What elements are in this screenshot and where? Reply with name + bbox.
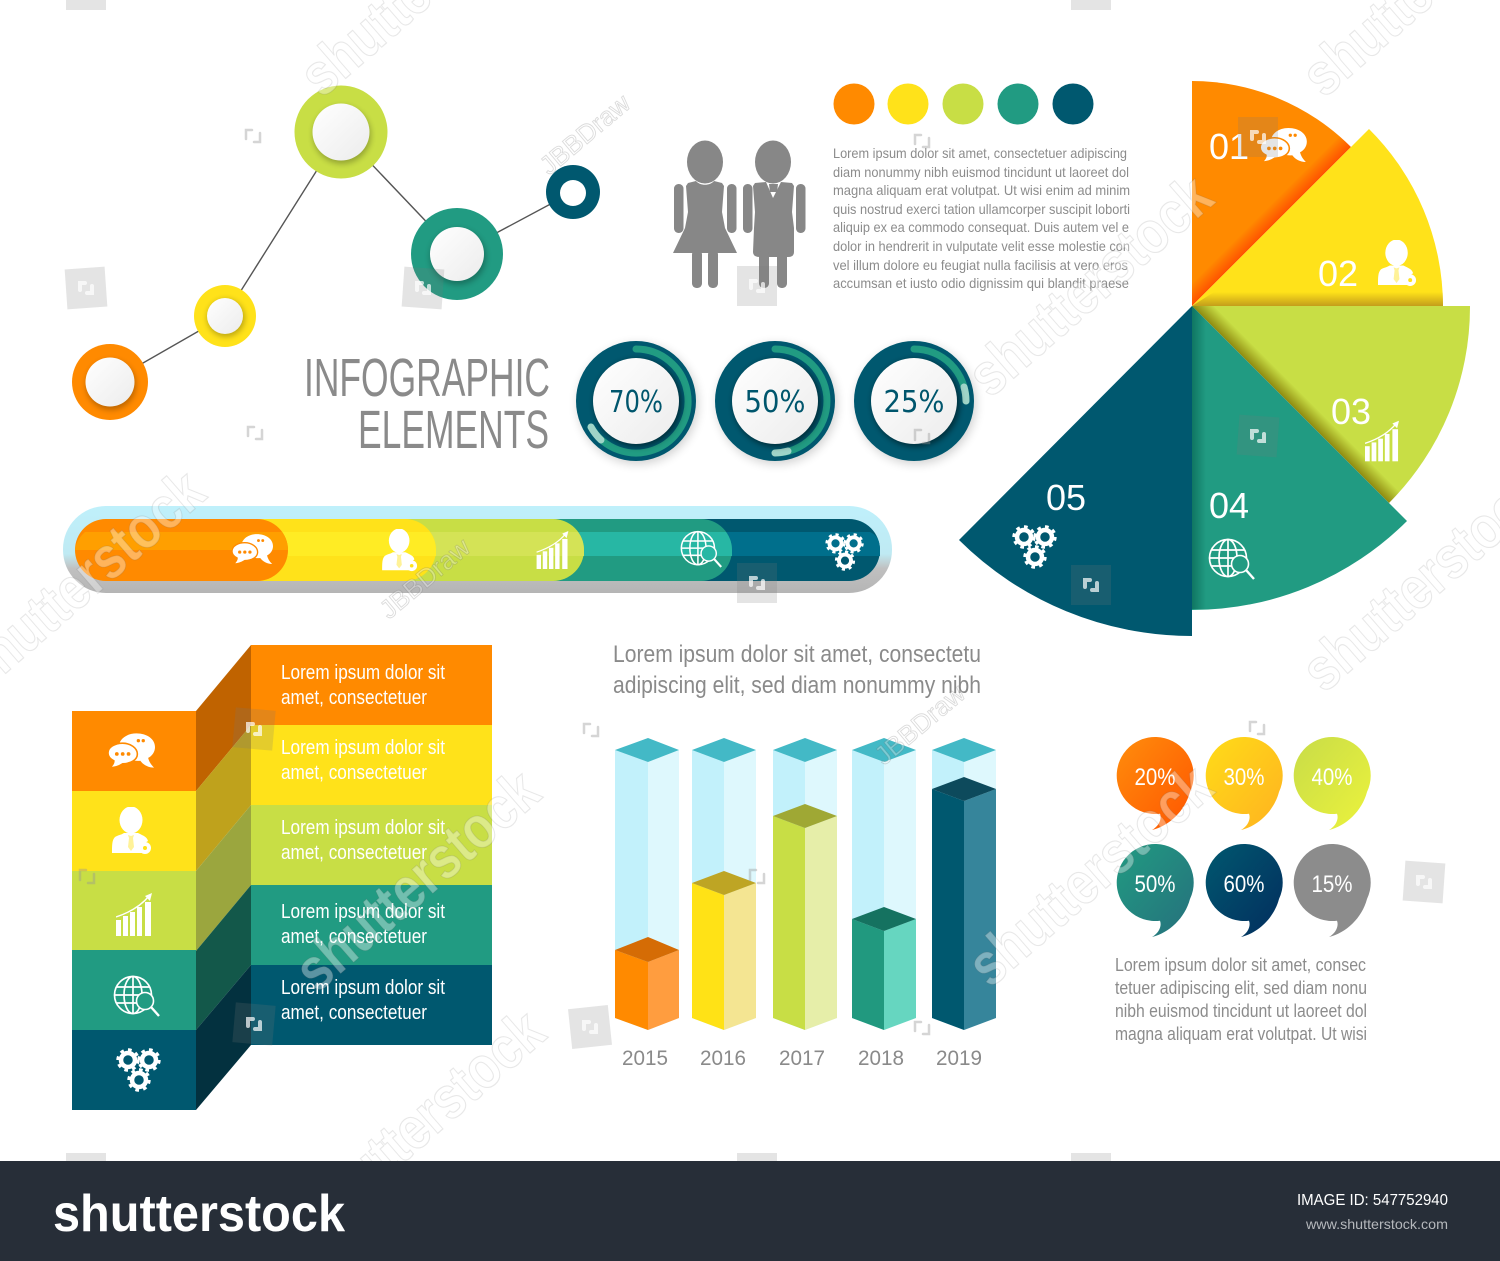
chart heading xyxy=(613,641,981,699)
row 3 xyxy=(251,805,492,885)
row 5: Lorem ipsum dolor sit xyxy=(281,977,445,999)
speech bubble 15%: 15% xyxy=(1312,871,1352,898)
folded list xyxy=(72,645,492,1110)
row 1: Lorem ipsum dolor sit xyxy=(281,662,445,684)
node: navy xyxy=(546,165,600,219)
node: orange xyxy=(72,344,148,420)
top text block: aliquip ex ea commodo consequat. Duis autem vel e xyxy=(833,219,1129,235)
row 5 xyxy=(251,965,492,1045)
icon: chart xyxy=(537,531,568,569)
bar 2019 xyxy=(932,738,996,1030)
footer bar xyxy=(0,1161,1500,1261)
title xyxy=(304,348,550,460)
stock watermark: shutterstock xyxy=(955,161,1225,409)
top text block: dolor in hendrerit in vulputate velit esse molestie con xyxy=(833,238,1130,254)
year labels xyxy=(622,1047,982,1070)
icon: globe 04 xyxy=(1210,540,1254,579)
speech bubble 40%: 40% xyxy=(1312,764,1352,791)
site url: www.shutterstock.com xyxy=(1305,1216,1448,1232)
top text block: quis nostrud exerci tation ullamcorper suscipit loborti xyxy=(833,201,1130,217)
row 1 xyxy=(251,645,492,725)
bottom right text: Lorem ipsum dolor sit amet, consec xyxy=(1115,955,1366,975)
3D bar chart xyxy=(615,738,996,1070)
label 04: 04 xyxy=(1209,485,1249,526)
row 5: amet, consectetuer xyxy=(281,1002,427,1024)
year labels: 2015 xyxy=(622,1047,668,1070)
icon: chart xyxy=(116,893,152,936)
icon: person xyxy=(112,806,151,854)
donut 50%: 50% xyxy=(744,385,806,420)
chart heading: Lorem ipsum dolor sit amet, consectetu xyxy=(613,641,981,668)
speech bubble 30%: 30% xyxy=(1224,764,1264,791)
label 05: 05 xyxy=(1046,477,1086,518)
logo: shutterstock xyxy=(53,1185,345,1243)
row 4: Lorem ipsum dolor sit xyxy=(281,901,445,923)
icon: chat xyxy=(232,534,273,564)
icon: chat xyxy=(108,733,155,768)
chart heading: adipiscing elit, sed diam nonummy nibh xyxy=(613,672,981,699)
bar 2016 xyxy=(692,738,756,1030)
bottom right text: magna aliquam erat volutpat. Ut wisi xyxy=(1115,1024,1367,1044)
donut 25%: 25% xyxy=(884,385,944,420)
top text block: vel illum dolore eu feugiat nulla facilisis at vero eros xyxy=(833,257,1128,273)
icon: gears xyxy=(827,535,862,569)
speech bubble 60%: 60% xyxy=(1224,871,1264,898)
row 3: Lorem ipsum dolor sit xyxy=(281,817,445,839)
top text block: magna aliquam erat volutpat. Ut wisi enim ad minim xyxy=(833,182,1130,198)
icon: chat 01 xyxy=(1260,128,1307,162)
stock watermark: shutterstock xyxy=(282,756,552,1004)
bar 2017 xyxy=(773,738,837,1030)
year labels: 2019 xyxy=(936,1047,982,1070)
icon: globe xyxy=(114,976,159,1016)
row 2: amet, consectetuer xyxy=(281,762,427,784)
icon: globe xyxy=(681,532,721,567)
top text block: Lorem ipsum dolor sit amet, consectetuer adipiscing xyxy=(833,145,1127,161)
title: INFOGRAPHIC xyxy=(304,348,550,408)
top text block: diam nonummy nibh euismod tincidunt ut laoreet dol xyxy=(833,164,1129,180)
row 4 xyxy=(251,885,492,965)
node: teal xyxy=(411,208,503,300)
stock watermark: JBBDraw xyxy=(374,532,476,625)
slice 01 xyxy=(1192,81,1351,306)
row 3: amet, consectetuer xyxy=(281,842,427,864)
speech bubble 15% xyxy=(1294,844,1371,937)
title: ELEMENTS xyxy=(358,400,549,460)
slice 02 xyxy=(1192,129,1443,306)
speech bubble 60% xyxy=(1206,844,1283,937)
speech bubble 20% xyxy=(1117,737,1194,830)
label 01: 01 xyxy=(1209,126,1249,167)
icon: person xyxy=(382,529,417,571)
label 03: 03 xyxy=(1331,391,1371,432)
icon: person 02 xyxy=(1378,240,1416,286)
bar 2015 xyxy=(615,738,679,1030)
year labels: 2018 xyxy=(858,1047,904,1070)
year labels: 2016 xyxy=(700,1047,746,1070)
bottom right text xyxy=(1115,955,1367,1044)
speech bubble 50%: 50% xyxy=(1134,871,1176,898)
node: lime xyxy=(294,86,388,178)
node: yellow xyxy=(194,285,256,347)
speech bubble 50% xyxy=(1117,844,1194,937)
donut 70% xyxy=(576,341,698,464)
label 02: 02 xyxy=(1318,253,1358,294)
stock watermark: JBBDraw xyxy=(869,678,971,771)
node line chart xyxy=(72,86,600,420)
progress pill xyxy=(63,506,892,593)
slice 04 xyxy=(1192,306,1407,610)
donut 70%: 70% xyxy=(609,385,663,420)
icon: chart 03 xyxy=(1365,421,1399,461)
top text block: accumsan et iusto odio dignissim qui blandit praese xyxy=(833,275,1129,291)
slice 03 xyxy=(1192,306,1470,503)
stock watermark: shutterstock xyxy=(955,751,1225,999)
row 4: amet, consectetuer xyxy=(281,926,427,948)
icon: woman and man xyxy=(673,140,806,288)
stock watermark: JBBDraw xyxy=(534,88,636,181)
bottom right text: nibh euismod tincidunt ut laoreet dol xyxy=(1115,1001,1367,1021)
left column xyxy=(72,711,196,1110)
icon: gears 05 xyxy=(1014,527,1055,567)
fold xyxy=(196,645,251,1110)
pie chart xyxy=(959,81,1470,636)
donut 25% xyxy=(854,341,976,464)
year labels: 2017 xyxy=(779,1047,825,1070)
slice 05 xyxy=(959,306,1192,636)
row 2 xyxy=(251,725,492,805)
icon: gears xyxy=(118,1050,159,1090)
row 1: amet, consectetuer xyxy=(281,687,427,709)
bar 2018 xyxy=(852,738,916,1030)
speech bubble 30% xyxy=(1206,737,1283,830)
bottom right text: tetuer adipiscing elit, sed diam nonu xyxy=(1115,978,1367,998)
donut 50% xyxy=(715,341,837,464)
colour palette dots xyxy=(834,84,1094,124)
speech bubble 40% xyxy=(1294,737,1371,830)
stock watermark: shutterstock xyxy=(287,996,557,1244)
image id: IMAGE ID: 547752940 xyxy=(1297,1192,1448,1209)
speech bubble 20%: 20% xyxy=(1134,764,1176,791)
row 2: Lorem ipsum dolor sit xyxy=(281,737,445,759)
top text block xyxy=(833,145,1130,291)
